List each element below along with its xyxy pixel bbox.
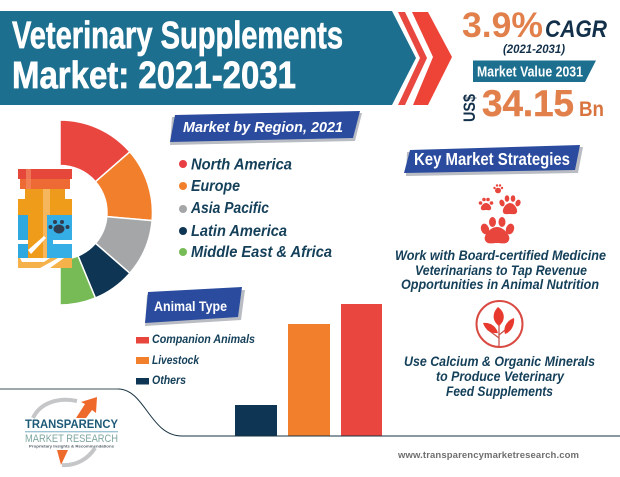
logo: Transparency Market Research: TRANSPARENCY [25,417,118,431]
website url: www.transparencymarketresearch.com [397,450,579,461]
market value ribbon [473,60,596,82]
region legend: Latin America [191,223,287,240]
logo: Transparency Market Research: Proprietary Insights & Recommendations [29,444,114,448]
market value ribbon: Market Value 2031 [477,64,583,80]
header banner [0,11,452,105]
icon: plant in circle [476,301,522,347]
heading ribbon: market by region: Market by Region, 2021 [183,119,343,136]
region legend: Asia Pacific [190,200,269,217]
heading ribbon: market by region [170,111,362,145]
heading ribbon: animal type [145,287,245,326]
animal type legend [136,332,255,387]
market value figure: Bn [579,98,604,121]
heading ribbon: key market strategies [404,145,583,176]
region legend: Europe [191,178,240,195]
donut chart: market by region [60,120,152,305]
animal type legend: Companion Animals [152,332,255,346]
market value figure: US$ [461,94,479,122]
strategy text 2 [404,353,595,399]
logo: Transparency Market Research [25,397,118,465]
region legend: North America [191,156,292,174]
icon: supplement bottle [18,169,72,268]
strategy text 2: Feed Supplements [446,383,553,399]
title: Market: 2021-2031 [12,55,296,97]
heading ribbon: animal type: Animal Type [154,298,227,314]
strategy text 2: Use Calcium & Organic Minerals [404,353,595,369]
title [12,15,343,97]
segment: Latin America [78,243,130,298]
icon: paw prints [479,184,522,243]
region legend [179,156,332,261]
market value figure [461,83,604,124]
segment: Asia Pacific [96,217,152,273]
animal type legend: Livestock [152,353,200,367]
CAGR stat: 3.9% [462,6,543,45]
logo: Transparency Market Research: MARKET RESEARCH [25,433,118,445]
segment: Europe [96,152,152,221]
heading ribbon: key market strategies: Key Market Strategies [414,149,570,169]
CAGR stat: (2021-2031) [503,44,565,56]
segment: Middle East and Africa [60,256,95,305]
strategy text 1: Opportunities in Animal Nutrition [401,276,599,292]
animal type legend: Others [152,373,186,387]
CAGR stat [462,6,608,56]
bar chart: animal type [235,304,382,436]
title: Veterinary Supplements [12,15,343,57]
region legend: Middle East & Africa [191,244,332,261]
strategy text 1 [395,247,606,292]
icon: paw on label [48,220,70,234]
market value figure: 34.15 [482,83,574,124]
segment: North America [60,120,130,182]
CAGR stat: CAGR [545,16,608,43]
strategy text 1: Veterinarians to Tap Revenue [415,262,587,278]
strategy text 2: to Produce Veterinary [436,368,565,384]
